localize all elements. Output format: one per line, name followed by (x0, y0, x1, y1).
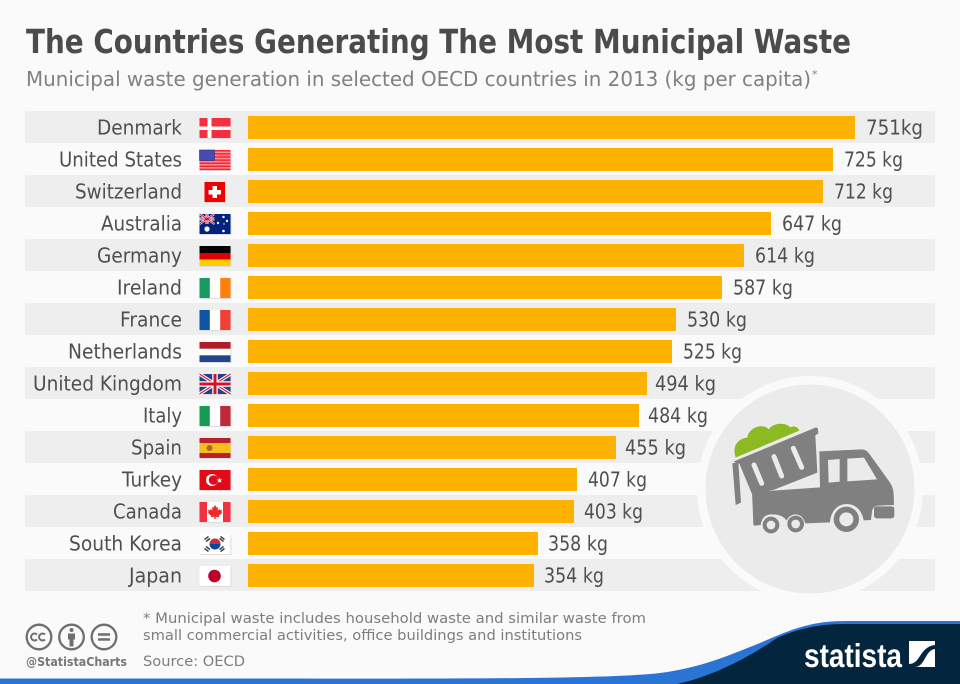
value: United Kingdom: 494 kg (655, 372, 716, 396)
flag: Spain (200, 438, 232, 459)
label: Japan: Japan (127, 564, 182, 588)
value: Australia: 647 kg (782, 212, 842, 236)
value: Spain: 455 kg (625, 436, 686, 460)
icon: truck tipper bed (732, 428, 894, 533)
label: Switzerland: Switzerland (75, 180, 182, 204)
bar: Spain 455 (248, 436, 616, 459)
row: Turkey (121, 468, 647, 492)
value: Canada: 403 kg (584, 500, 643, 524)
row: Germany (25, 239, 935, 271)
flag: Turkey (200, 470, 232, 491)
flag: United Kingdom (200, 374, 232, 395)
label: United States: United States (59, 148, 182, 172)
icon: truck windows (767, 458, 877, 529)
value: Turkey: 407 kg (588, 468, 647, 492)
subtitle asterisk: * (812, 68, 818, 81)
flag: Italy (200, 406, 232, 427)
label: Ireland: Ireland (117, 276, 182, 300)
footnote: * Municipal waste includes household waste and similar waste from (143, 611, 646, 627)
value: Denmark: 751kg (866, 116, 923, 140)
label: Turkey: Turkey (121, 468, 182, 492)
row: Spain (25, 431, 935, 463)
bar: Germany 614 (248, 244, 744, 267)
label: Italy: Italy (143, 404, 182, 428)
bar: Australia 647 (248, 212, 771, 235)
row: Denmark (25, 111, 935, 143)
footer swoosh (0, 621, 960, 684)
label: Denmark: Denmark (97, 116, 182, 140)
source: Source: OECD (143, 654, 245, 670)
bar: United States 725 (248, 148, 833, 171)
value: Switzerland: 712 kg (834, 180, 893, 204)
label: Canada: Canada (113, 500, 182, 524)
flag: South Korea (200, 534, 232, 555)
value: France: 530 kg (687, 308, 747, 332)
label: United Kingdom: United Kingdom (33, 372, 182, 396)
bar: Netherlands 525 (248, 340, 672, 363)
bar: Turkey 407 (248, 468, 577, 491)
label: Germany: Germany (97, 244, 182, 268)
value: Germany: 614 kg (755, 244, 815, 268)
label: France: France (120, 308, 182, 332)
bar: Denmark 751 (248, 116, 855, 139)
bar: Japan 354 (248, 564, 534, 587)
bar: United Kingdom 494 (248, 372, 647, 395)
flag: Japan (200, 566, 232, 587)
row: United States (59, 148, 903, 172)
flag: Netherlands (200, 342, 232, 363)
row: Japan (25, 559, 935, 591)
value: Japan: 354 kg (544, 564, 604, 588)
flag: Australia (200, 214, 232, 235)
value: United States: 725 kg (844, 148, 903, 172)
logo: statista wordmark: statista (804, 637, 903, 674)
icon: dump truck in circle (697, 376, 923, 602)
row: South Korea (69, 532, 608, 556)
value: Italy: 484 kg (648, 404, 708, 428)
flag: Germany (200, 246, 232, 267)
flag: Canada (200, 502, 232, 523)
row: Canada (25, 495, 935, 527)
value: Ireland: 587 kg (733, 276, 793, 300)
row: United Kingdom (25, 367, 935, 399)
icon: truck body (752, 449, 894, 526)
bar: Ireland 587 (248, 276, 722, 299)
bar: Canada 403 (248, 500, 574, 523)
bar chart (25, 111, 935, 591)
footnote: small commercial activities, office buildings and institutions (143, 628, 582, 644)
bar: Italy 484 (248, 404, 639, 427)
icon: creative commons licence (27, 625, 116, 649)
row: France (25, 303, 935, 335)
flag: United States (200, 150, 232, 171)
flag: France (200, 310, 232, 331)
footnote (143, 611, 646, 644)
value: South Korea: 358 kg (548, 532, 608, 556)
row: Switzerland (25, 175, 935, 207)
social handle: @StatistaCharts (26, 655, 127, 669)
bar: Switzerland 712 (248, 180, 823, 203)
row: Italy (143, 404, 708, 428)
row: Australia (101, 212, 842, 236)
bar: France 530 (248, 308, 676, 331)
label: Australia: Australia (101, 212, 182, 236)
icon: tipper bed slots (754, 448, 802, 483)
icon: bed gap lines (735, 431, 800, 458)
label: Spain: Spain (131, 436, 182, 460)
logo: statista mark (909, 641, 935, 667)
label: Netherlands: Netherlands (68, 340, 182, 364)
flag: Ireland (200, 278, 232, 299)
row: Netherlands (68, 340, 742, 364)
flag: Switzerland (204, 182, 226, 203)
row: Ireland (117, 276, 793, 300)
icon: green waste load (734, 424, 799, 458)
value: Netherlands: 525 kg (683, 340, 742, 364)
label: South Korea: South Korea (69, 532, 182, 556)
subtitle: Municipal waste generation in selected OECD countries in 2013 (kg per capita) (26, 67, 811, 91)
flag: Denmark (200, 118, 232, 139)
bar: South Korea 358 (248, 532, 538, 555)
